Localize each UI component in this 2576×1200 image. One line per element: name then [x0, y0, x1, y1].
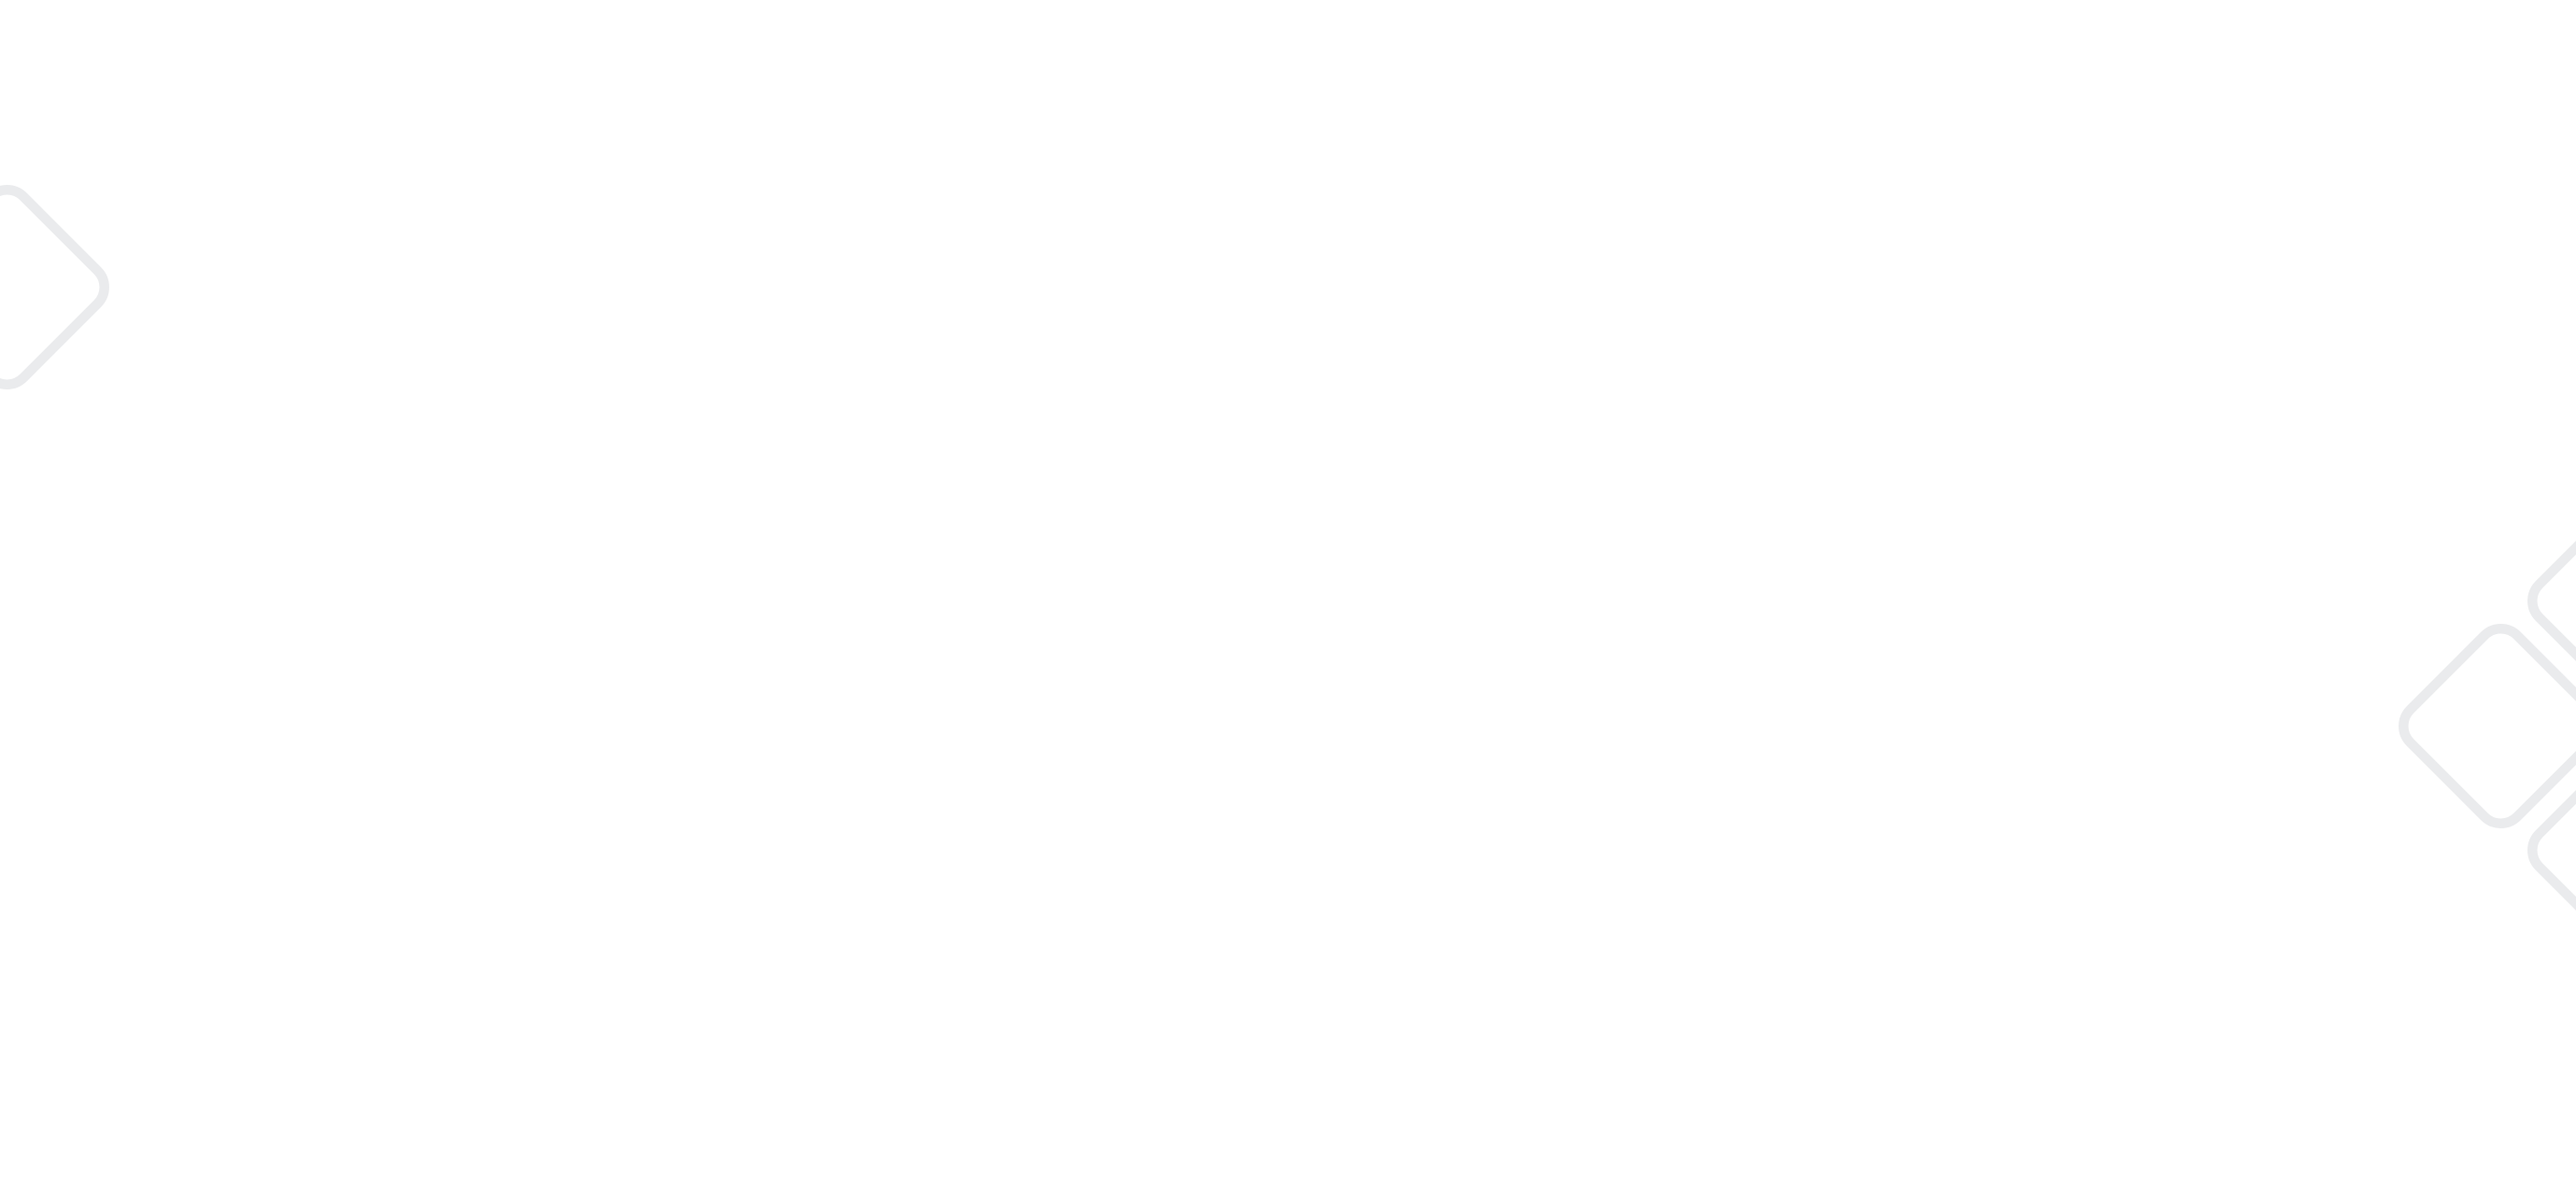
diamond outline: left edge: [0, 180, 114, 394]
diamond outline: right upper: [2523, 494, 2576, 708]
diamond outline: right middle: [2394, 619, 2576, 833]
diamond outline: right lower: [2523, 743, 2576, 957]
